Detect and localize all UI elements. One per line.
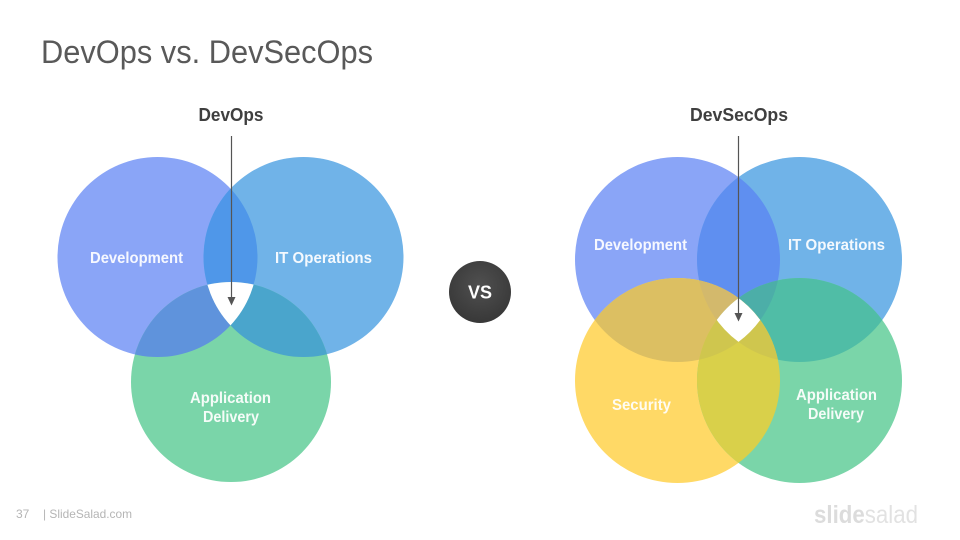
overlap: Development and Application Delivery (135, 284, 230, 357)
label: Application Delivery (190, 390, 271, 426)
label: Application Delivery: Delivery (808, 406, 864, 423)
title: DevOps vs. DevSecOps (41, 34, 373, 70)
overlap: Security, Application Delivery, Development or IT (700, 298, 778, 360)
overlap: Development, IT Operations, Security (699, 280, 738, 320)
center: quadruple overlap (716, 298, 760, 342)
venn diagram: DevOps (58, 157, 404, 482)
circle: Application Delivery (131, 282, 331, 482)
arrow: DevSecOps (734, 136, 742, 322)
circle: Development (58, 157, 258, 357)
label: Development: Development (90, 250, 184, 267)
label: Development: Development (594, 237, 688, 254)
label: Application Delivery: Application (796, 387, 877, 404)
label: IT Operations: IT Operations (275, 250, 372, 267)
heading: DevOps: DevOps (198, 105, 264, 125)
circle: Development (575, 157, 780, 362)
overlap: IT Operations and Application Delivery (740, 278, 882, 362)
circle: Security (575, 278, 780, 483)
overlap: IT Operations and Application Delivery (230, 284, 327, 357)
circle: IT Operations (697, 157, 902, 362)
overlap: Development and Security (594, 278, 738, 362)
circle: Application Delivery (697, 278, 902, 483)
overlap: Development and IT Operations (697, 178, 780, 298)
footer: website: | SlideSalad.com (43, 507, 132, 521)
label: Application Delivery (796, 387, 877, 423)
circle: IT Operations (204, 157, 404, 357)
label: Security: Security (612, 397, 671, 414)
logo: slidesalad: slidesalad (814, 501, 918, 529)
label: IT Operations: IT Operations (788, 237, 885, 254)
heading: DevSecOps: DevSecOps (690, 105, 788, 125)
overlap: Security and Application Delivery (697, 320, 780, 463)
arrow: DevOps (228, 136, 236, 306)
badge: VS (449, 261, 511, 323)
badge: VS: VS (468, 282, 492, 302)
center: triple overlap (207, 282, 254, 326)
overlap: Development and IT Operations (204, 188, 258, 284)
label: Application Delivery: Application (190, 390, 271, 407)
overlap: Development, IT Operations, Application Delivery (716, 280, 778, 320)
footer: page number: 37 (16, 507, 30, 521)
venn diagram: DevSecOps (575, 157, 902, 483)
label: Application Delivery: Delivery (203, 409, 259, 426)
